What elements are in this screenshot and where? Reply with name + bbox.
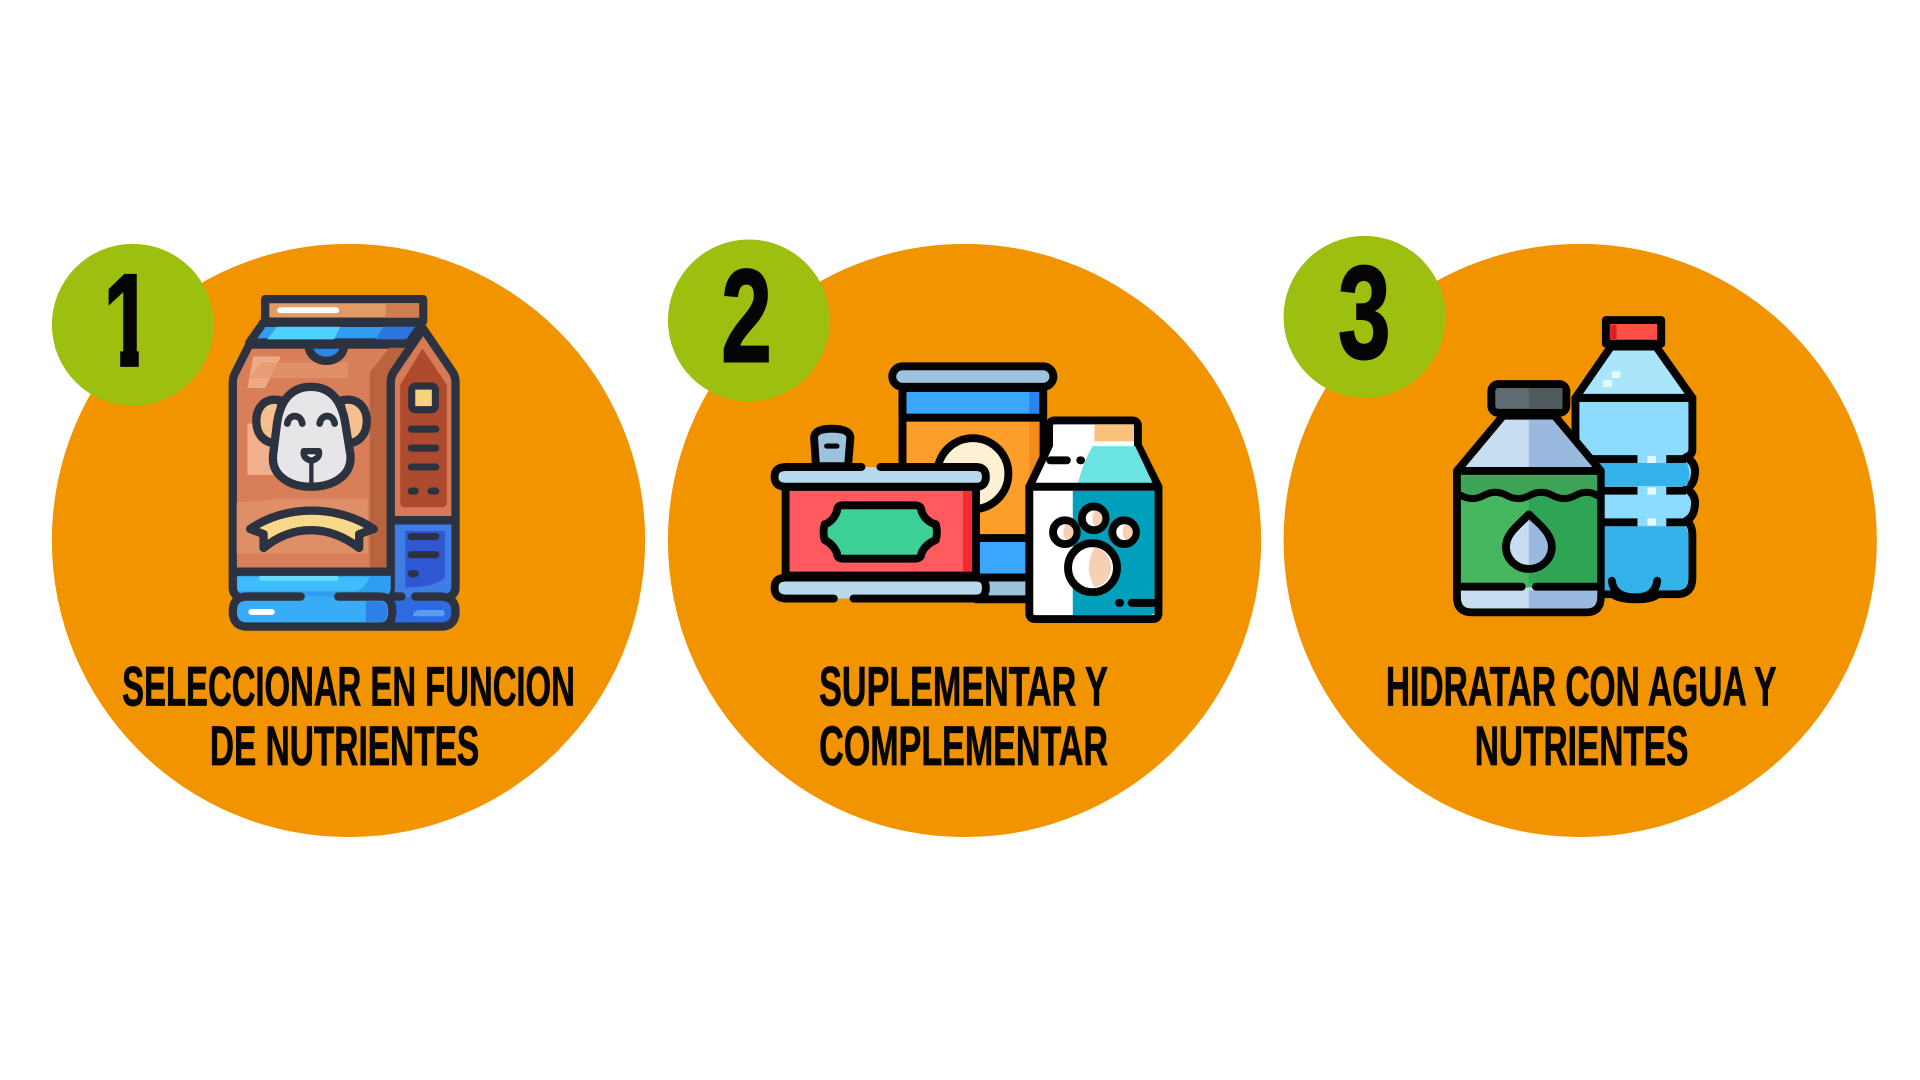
label 3: NUTRIENTES	[1475, 715, 1688, 777]
number badge 2	[668, 239, 830, 401]
label 1: SELECCIONAR EN FUNCION	[122, 656, 575, 718]
icon: water bottles	[1457, 320, 1695, 612]
panel: step 1 select by nutrients	[52, 244, 645, 837]
label 3	[1386, 656, 1777, 777]
orange circle 3	[1284, 244, 1877, 837]
label 1: DE NUTRIENTES	[210, 715, 479, 777]
icon: cans and carton	[775, 366, 1158, 619]
panel: step 2 supplement and complement	[668, 239, 1261, 837]
orange circle 2	[668, 244, 1261, 837]
number badge 2: 2	[721, 243, 772, 391]
number badge 3: 3	[1338, 239, 1391, 387]
orange circle 1	[52, 244, 645, 837]
icon: dog food bag	[233, 299, 456, 627]
number badge 3	[1284, 236, 1446, 398]
label 2: SUPLEMENTAR Y	[819, 656, 1108, 718]
label 2: COMPLEMENTAR	[819, 715, 1108, 777]
label 2	[819, 656, 1108, 777]
panel: step 3 hydrate	[1284, 236, 1877, 837]
number badge 1: 1	[103, 247, 153, 395]
number badge 1	[52, 244, 214, 406]
label 1	[122, 656, 575, 777]
